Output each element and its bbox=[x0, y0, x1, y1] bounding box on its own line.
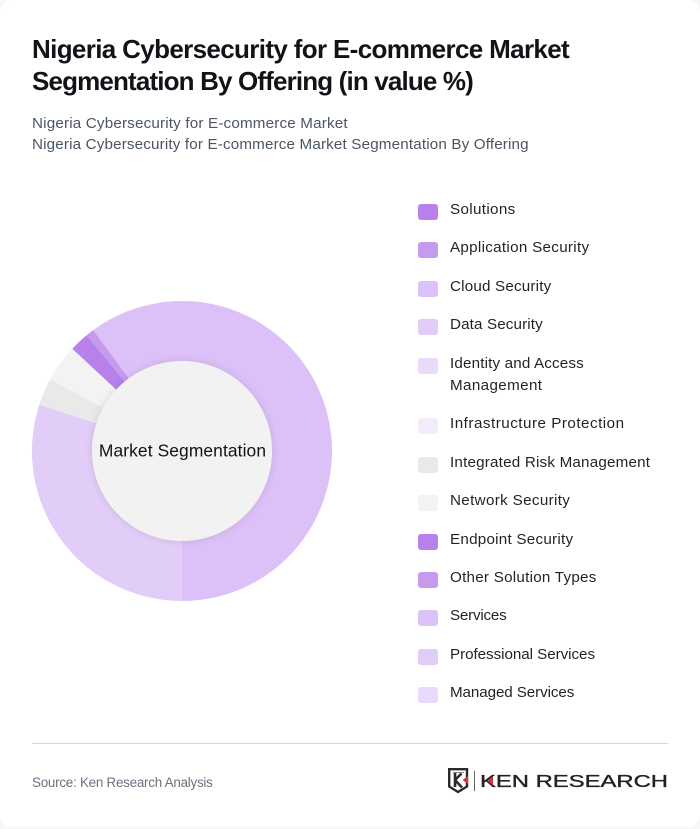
donut chart bbox=[32, 301, 332, 601]
legend label: services: Services bbox=[450, 607, 506, 624]
segment: integrated risk management bbox=[39, 379, 103, 423]
legend label: network security: Network Security bbox=[450, 492, 570, 509]
segment: managed services bbox=[32, 405, 182, 601]
legend label: identity and access management bbox=[450, 355, 584, 394]
title: Nigeria Cybersecurity for E-commerce Market bbox=[32, 34, 569, 64]
legend swatch: identity and access management bbox=[418, 358, 438, 374]
subtitle: Nigeria Cybersecurity for E-commerce Market Segmentation By Offering bbox=[32, 136, 529, 153]
legend label: cloud security: Cloud Security bbox=[450, 278, 551, 295]
legend swatch: application security bbox=[418, 242, 438, 258]
legend label: professional services: Professional Services bbox=[450, 646, 595, 663]
logo: Ken Research bbox=[448, 768, 668, 794]
legend label: other solution types: Other Solution Types bbox=[450, 569, 597, 586]
legend swatch: solutions bbox=[418, 204, 438, 220]
legend swatch: cloud security bbox=[418, 281, 438, 297]
segment: network security bbox=[50, 349, 116, 408]
source note: Source: Ken Research Analysis bbox=[32, 775, 213, 790]
legend label: endpoint security: Endpoint Security bbox=[450, 531, 573, 548]
legend swatch: managed services bbox=[418, 687, 438, 703]
legend label: data security: Data Security bbox=[450, 316, 543, 333]
logo wordmark: KEN RESEARCH bbox=[480, 771, 668, 791]
legend label: identity and access management: Management bbox=[450, 377, 542, 394]
subtitle bbox=[32, 115, 529, 153]
legend label: infrastructure protection: Infrastructure Protection bbox=[450, 415, 625, 432]
legend label: integrated risk management: Integrated Risk Management bbox=[450, 454, 650, 471]
legend swatch: endpoint security bbox=[418, 534, 438, 550]
title bbox=[32, 34, 570, 96]
legend bbox=[418, 201, 650, 703]
segment: endpoint security bbox=[72, 335, 125, 390]
subtitle: Nigeria Cybersecurity for E-commerce Market bbox=[32, 115, 348, 132]
legend swatch: other solution types bbox=[418, 572, 438, 588]
segment: other solution types bbox=[87, 330, 129, 382]
segment: services bbox=[93, 301, 332, 601]
legend swatch: integrated risk management bbox=[418, 457, 438, 473]
legend label: application security: Application Security bbox=[450, 239, 589, 256]
logo shield icon bbox=[449, 769, 468, 792]
legend swatch: infrastructure protection bbox=[418, 418, 438, 434]
legend label: identity and access management: Identity and Access bbox=[450, 355, 584, 372]
center circle bbox=[92, 361, 272, 541]
legend swatch: data security bbox=[418, 319, 438, 335]
legend swatch: services bbox=[418, 610, 438, 626]
legend swatch: network security bbox=[418, 495, 438, 511]
center shadow bbox=[92, 360, 272, 542]
title: Segmentation By Offering (in value %) bbox=[32, 66, 473, 96]
center label: Market Segmentation bbox=[99, 440, 266, 460]
legend label: solutions: Solutions bbox=[450, 201, 516, 218]
legend swatch: professional services bbox=[418, 649, 438, 665]
legend label: managed services: Managed Services bbox=[450, 684, 574, 701]
